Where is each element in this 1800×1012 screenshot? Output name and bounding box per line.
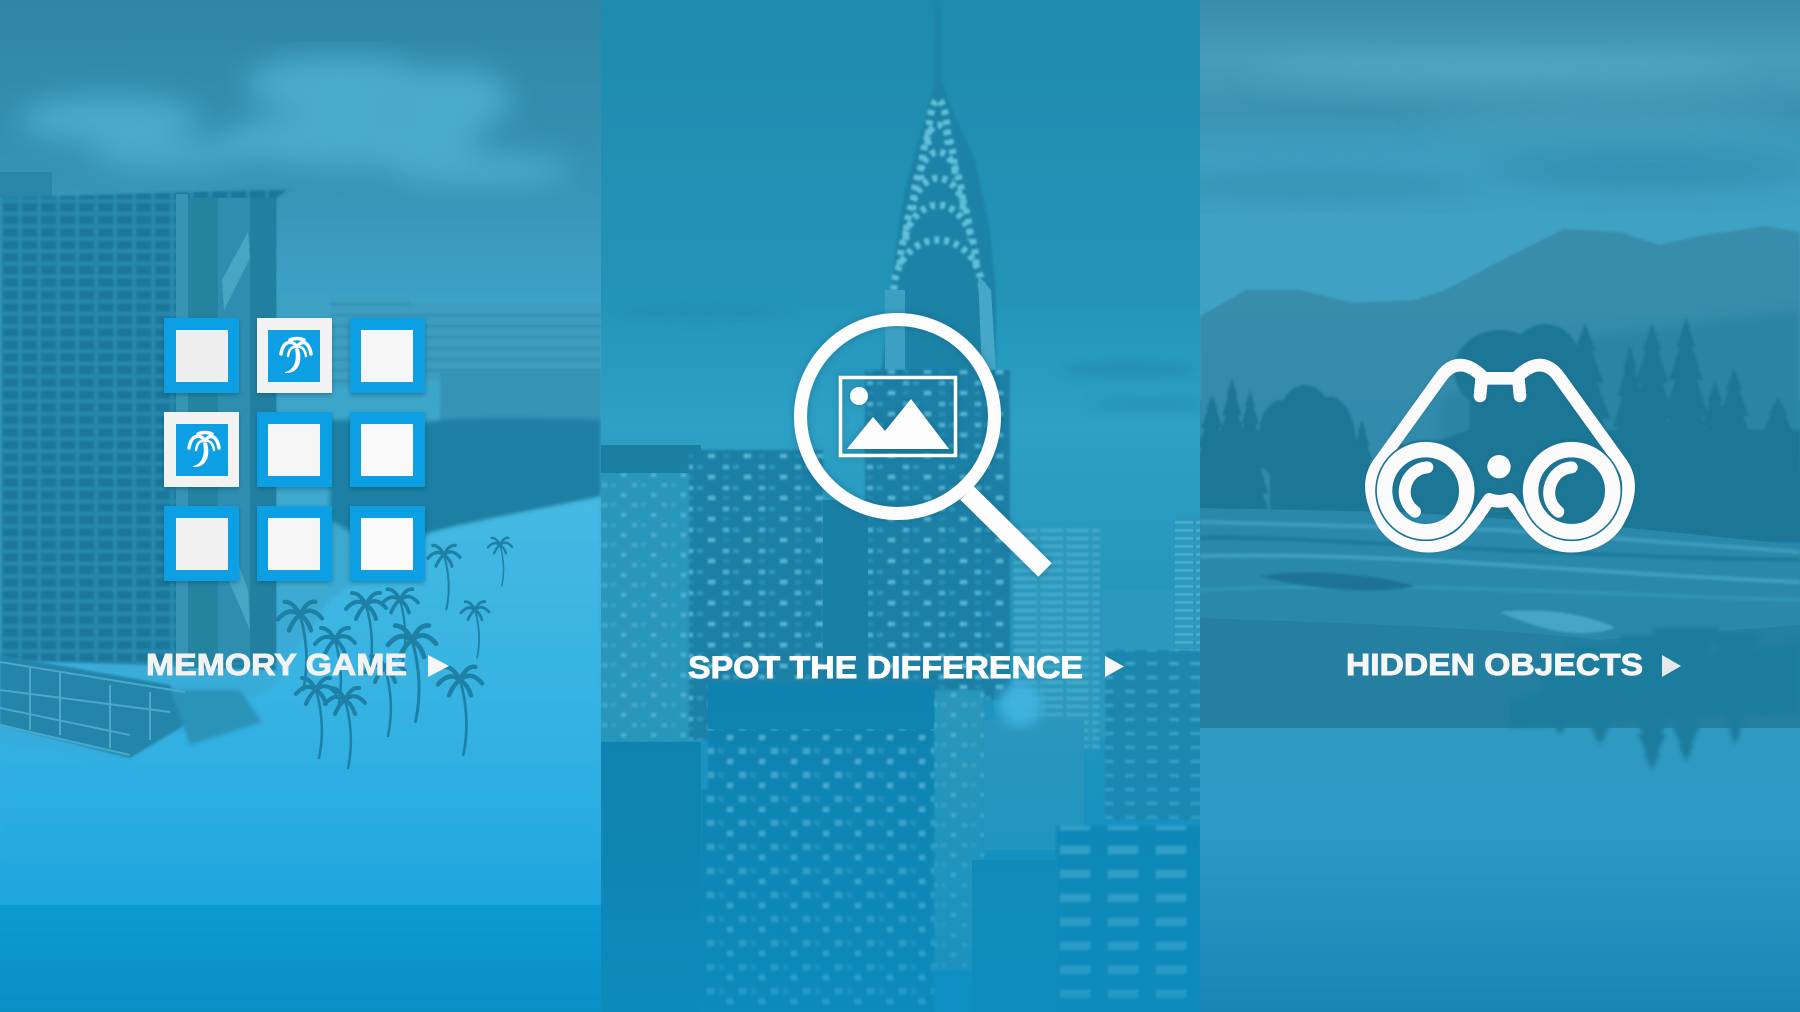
- label: hidden objects: HIDDEN OBJECTS: [1346, 648, 1643, 682]
- panel: spot the difference: [601, 0, 1210, 1012]
- arrow: memory game: [428, 655, 449, 677]
- icon: binoculars: [1371, 365, 1629, 546]
- label: memory game: MEMORY GAME: [146, 648, 407, 682]
- label: spot the difference: SPOT THE DIFFERENCE: [688, 649, 1083, 685]
- card 5: [257, 412, 332, 487]
- background photo: beach hotel: [0, 0, 601, 1012]
- panel: hidden objects: [1150, 0, 1800, 1012]
- panel: memory game: [0, 0, 601, 1012]
- card 1: [164, 318, 239, 393]
- icon: magnifying glass over picture: [800, 320, 1045, 570]
- card 2: revealed palm: [257, 318, 332, 393]
- arrow: hidden objects: [1662, 655, 1681, 677]
- card 9: [350, 506, 425, 581]
- card 8: [257, 506, 332, 581]
- card 6: [350, 412, 425, 487]
- card 3: [350, 318, 425, 393]
- icon: palm tree: [281, 338, 311, 373]
- card 4: revealed palm: [164, 412, 239, 487]
- card grid: [164, 318, 425, 581]
- arrow: spot the difference: [1105, 656, 1124, 677]
- card 7: [164, 506, 239, 581]
- icon: palm tree: [189, 432, 219, 467]
- background photo: city skyline: [601, 0, 1210, 1012]
- tree reflection: [1510, 628, 1800, 770]
- crown of the tower: [880, 0, 996, 380]
- background photo: mountain lake: [1150, 0, 1800, 1012]
- palms: [296, 678, 336, 758]
